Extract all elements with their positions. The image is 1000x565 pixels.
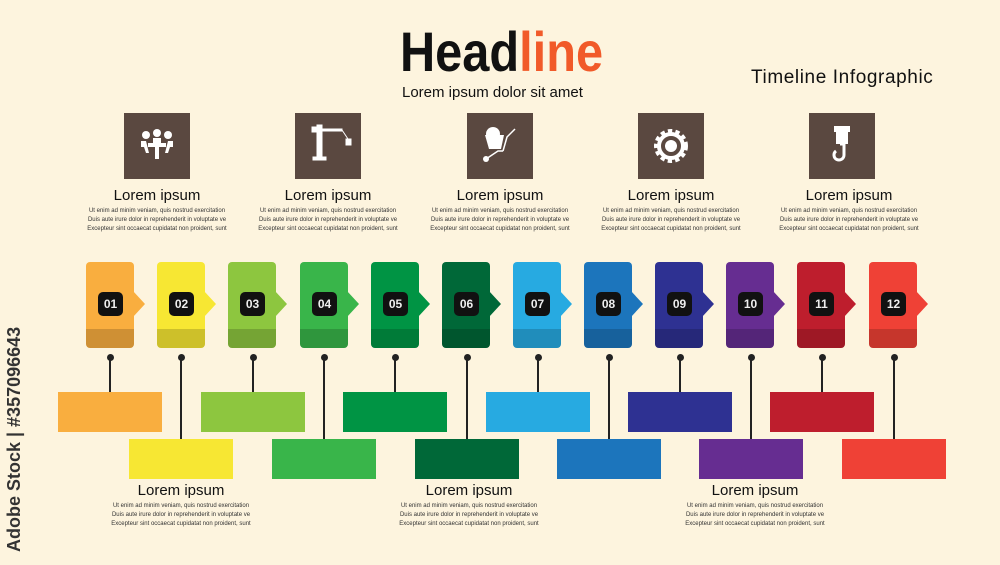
text: Ut enim ad minim veniam, quis nostrud exercitation — [687, 503, 823, 509]
text: Lorem ipsum — [114, 187, 200, 204]
timeline steps: 08 — [602, 297, 615, 311]
text: Duis aute irure dolor in reprehenderit in voluptate ve — [112, 512, 250, 518]
text: Duis aute irure dolor in reprehenderit in voluptate ve — [602, 217, 740, 223]
text: Ut enim ad minim veniam, quis nostrud exercitation — [603, 208, 739, 214]
icon: gear — [638, 113, 704, 179]
text: Lorem ipsum — [426, 482, 512, 499]
timeline steps: 01 — [104, 297, 117, 311]
text: Ut enim ad minim veniam, quis nostrud exercitation — [113, 503, 249, 509]
timeline steps: 06 — [460, 297, 473, 311]
text: Duis aute irure dolor in reprehenderit in voluptate ve — [259, 217, 397, 223]
text: Ut enim ad minim veniam, quis nostrud exercitation — [401, 503, 537, 509]
text: Lorem ipsum — [712, 482, 798, 499]
label rectangles — [58, 392, 162, 432]
timeline steps: 02 — [175, 297, 188, 311]
text: Excepteur sint occaecat cupidatat non proident, sunt — [430, 226, 570, 232]
subtitle: Lorem ipsum dolor sit amet — [402, 84, 583, 101]
timeline steps: 10 — [744, 297, 757, 311]
text: Excepteur sint occaecat cupidatat non proident, sunt — [399, 521, 539, 527]
text: Lorem ipsum — [285, 187, 371, 204]
icon: hook — [809, 113, 875, 179]
text: Duis aute irure dolor in reprehenderit in voluptate ve — [686, 512, 824, 518]
timeline steps: 03 — [246, 297, 259, 311]
text: Ut enim ad minim veniam, quis nostrud exercitation — [89, 208, 225, 214]
text: Excepteur sint occaecat cupidatat non proident, sunt — [87, 226, 227, 232]
text: Excepteur sint occaecat cupidatat non proident, sunt — [601, 226, 741, 232]
connectors — [109, 357, 111, 392]
text: Excepteur sint occaecat cupidatat non proident, sunt — [258, 226, 398, 232]
text: Duis aute irure dolor in reprehenderit in voluptate ve — [88, 217, 226, 223]
text: Duis aute irure dolor in reprehenderit in voluptate ve — [400, 512, 538, 518]
timeline steps: 04 — [318, 297, 331, 311]
timeline steps: 05 — [389, 297, 402, 311]
timeline steps: 11 — [815, 297, 828, 311]
icon: crane — [295, 113, 361, 179]
timeline steps: 07 — [531, 297, 544, 311]
text: Excepteur sint occaecat cupidatat non proident, sunt — [685, 521, 825, 527]
text: Lorem ipsum — [628, 187, 714, 204]
bottom text blocks — [111, 482, 825, 527]
text: Lorem ipsum — [457, 187, 543, 204]
title: Headline — [400, 20, 603, 83]
text: Ut enim ad minim veniam, quis nostrud exercitation — [432, 208, 568, 214]
timeline label: Timeline Infographic — [751, 67, 933, 88]
text: Lorem ipsum — [138, 482, 224, 499]
timeline steps: 09 — [673, 297, 686, 311]
text: Lorem ipsum — [806, 187, 892, 204]
text: Excepteur sint occaecat cupidatat non proident, sunt — [111, 521, 251, 527]
timeline steps: 12 — [887, 297, 900, 311]
text: Duis aute irure dolor in reprehenderit in voluptate ve — [780, 217, 918, 223]
text: Ut enim ad minim veniam, quis nostrud exercitation — [781, 208, 917, 214]
text: Ut enim ad minim veniam, quis nostrud exercitation — [260, 208, 396, 214]
icon: wheelbarrow — [467, 113, 533, 179]
side text: Adobe Stock | #357096643 — [4, 327, 24, 552]
text: Duis aute irure dolor in reprehenderit in voluptate ve — [431, 217, 569, 223]
top text blocks — [87, 187, 919, 232]
text: Excepteur sint occaecat cupidatat non proident, sunt — [779, 226, 919, 232]
icon: meeting — [124, 113, 190, 179]
